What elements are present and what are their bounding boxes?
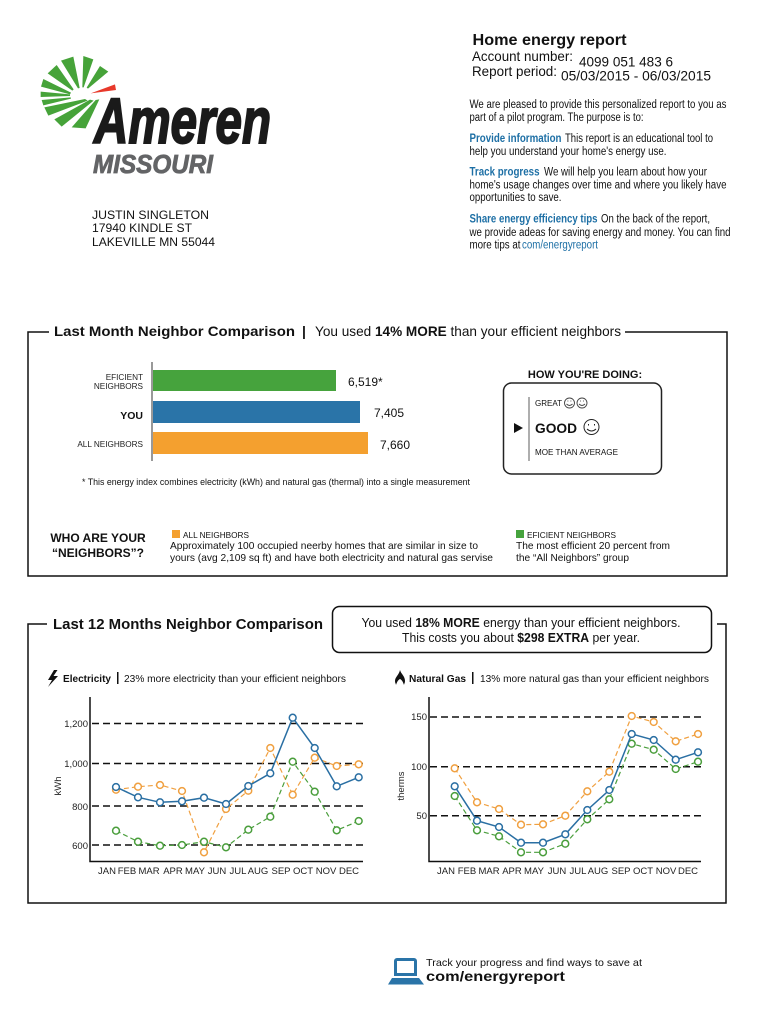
bar: you: 7,405 [374,406,404,420]
callout [332,606,712,652]
intro text: opportunities to save. [470,192,562,204]
intro text: part of a pilot program. The purpose is to: [470,112,644,124]
mailing address [92,208,215,249]
intro text: home's usage changes over time and where you likely have [470,180,726,192]
line chart: natural gas: JAN [437,866,455,877]
panel heading [54,323,621,339]
panel heading: You used 14% MORE than your efficient neighbors [315,323,621,339]
bar: efficient neighbors: EFICIENT [106,373,143,382]
chart footnote: * This energy index combines electricity (kWh) and natural gas (thermal) into a single measurement [82,477,471,487]
who are your neighbors heading: “NEIGHBORS”? [52,546,144,560]
report heading [472,32,711,84]
electricity heading: 23% more electricity than your efficient neighbors [124,673,346,685]
line chart: natural gas: APR [502,866,522,877]
who are your neighbors heading [50,531,146,560]
icon: two smileys [564,398,587,408]
how you're doing status [504,369,662,474]
electricity heading: Electricity [63,673,111,685]
report heading: Account number: [472,48,573,64]
panel: last 12 months neighbor comparison [28,606,726,903]
natural gas heading [395,670,709,685]
report heading: Report period: [472,63,557,79]
line chart: natural gas: OCT [633,866,653,877]
how you're doing status: GOOD [535,420,577,436]
line chart: natural gas: MAR [478,866,500,877]
how you're doing status: HOW YOU'RE DOING: [528,369,642,381]
how you're doing status: GREAT [535,398,562,408]
line chart: natural gas: 50 [416,811,427,822]
all neighbors definition: ALL NEIGHBORS [183,530,249,540]
icon: smiley [584,420,599,434]
line chart: natural gas: FEB [458,866,476,877]
series: efficient neighbors [451,740,701,856]
line chart: electricity: DEC [339,866,359,877]
natural gas heading: 13% more natural gas than your efficient neighbors [480,673,709,685]
natural gas heading: Natural Gas [409,673,466,685]
line chart: electricity: NOV [316,866,337,877]
icon: flame [395,670,405,685]
line chart: electricity: JAN [98,866,116,877]
icon: sunburst [41,56,116,128]
series: efficient neighbors [113,758,362,851]
line chart: natural gas: AUG [588,866,608,877]
intro text: help you understand your home's energy use. [470,146,666,158]
all neighbors definition: yours (avg 2,109 sq ft) and have both electricity and natural gas servise [170,552,493,564]
all neighbors definition: Approximately 100 occupied neerby homes that are similar in size to [170,540,478,552]
icon: lightning bolt [48,670,58,687]
line chart: natural gas: DEC [678,866,698,877]
mailing address: JUSTIN SINGLETON [92,208,209,222]
report heading: Home energy report [472,32,627,49]
website footer: Track your progress and find ways to save at [426,957,642,969]
website footer: com/energyreport [426,968,565,984]
line chart: electricity: AUG [248,866,268,877]
bar: all neighbors: 7,660 [380,438,410,452]
line chart: electricity: 1,200 [64,719,88,730]
bar: you: YOU [120,410,143,422]
all neighbors definition [170,530,493,564]
icon: laptop [388,958,424,984]
bar: efficient neighbors: 6,519* [348,375,383,389]
icon: arrow marker [514,423,523,433]
how you're doing status: MOE THAN AVERAGE [535,447,618,457]
line chart: natural gas: 150 [411,712,427,723]
who are your neighbors heading: WHO ARE YOUR [50,531,146,545]
line chart: natural gas: 100 [411,762,427,773]
panel heading: Last 12 Months Neighbor Comparison [53,617,323,633]
line chart: natural gas: therms [396,771,407,801]
line chart: natural gas [396,697,702,877]
intro text: Provide information [470,133,562,145]
line chart: natural gas: JUL [570,866,586,877]
panel: last month neighbor comparison [28,323,727,576]
line chart: electricity: 1,000 [64,759,88,770]
report heading: 05/03/2015 - 06/03/2015 [561,68,711,84]
intro text: We will help you learn about how your [544,166,707,178]
intro text: On the back of the report, [601,214,710,226]
series: all neighbors [451,713,701,828]
line chart: natural gas: NOV [656,866,677,877]
bar: efficient neighbors: NEIGHBORS [94,382,144,391]
panel heading: | [302,323,306,339]
efficient neighbors definition: The most efficient 20 percent from [516,540,670,552]
efficient neighbors definition [516,530,670,564]
line chart: natural gas: JUN [548,866,566,877]
logo subtitle: MISSOURI [93,151,214,179]
line chart: electricity: 600 [72,841,88,852]
panel heading: Last Month Neighbor Comparison [54,323,295,339]
efficient neighbors definition: EFICIENT NEIGHBORS [527,530,616,540]
mailing address: 17940 KINDLE ST [92,221,193,235]
callout: You used 18% MORE energy than your efficient neighbors. [362,616,680,630]
line chart: electricity: JUL [230,866,246,877]
line chart: electricity: APR [163,866,183,877]
line chart: electricity: kWh [53,776,64,796]
intro text: more tips at [470,240,521,252]
bar chart [77,362,410,461]
intro text: com/energyreport [522,240,599,252]
report heading: 4099 051 483 6 [579,54,673,70]
series: you [113,714,362,807]
line chart: electricity: MAY [185,866,206,877]
mailing address: LAKEVILLE MN 55044 [92,235,215,249]
bar: all neighbors [77,432,410,454]
bar: all neighbors: ALL NEIGHBORS [77,440,144,449]
efficient neighbors definition: the “All Neighbors” group [516,552,629,564]
callout: This costs you about $298 EXTRA per year. [402,631,640,645]
line chart: electricity: MAR [138,866,160,877]
intro text: This report is an educational tool to [565,133,713,145]
series: you [451,731,701,846]
line chart: electricity: SEP [271,866,291,877]
website footer [388,957,642,984]
logo: Ameren Missouri [41,56,271,179]
intro text: Share energy efficiency tips [470,214,598,226]
line chart: electricity: OCT [293,866,313,877]
line chart: electricity: FEB [118,866,136,877]
line chart: natural gas: MAY [524,866,545,877]
intro text [469,99,730,252]
series: all neighbors [113,745,362,856]
line chart: natural gas: SEP [611,866,631,877]
line chart: electricity [53,697,363,877]
logo wordmark: Ameren [93,85,271,157]
bar: you [120,401,404,423]
line chart: electricity: JUN [208,866,226,877]
intro text: Track progress [470,166,540,178]
line chart: electricity: 800 [72,802,88,813]
bar: efficient neighbors [94,370,383,391]
electricity heading [48,670,346,687]
